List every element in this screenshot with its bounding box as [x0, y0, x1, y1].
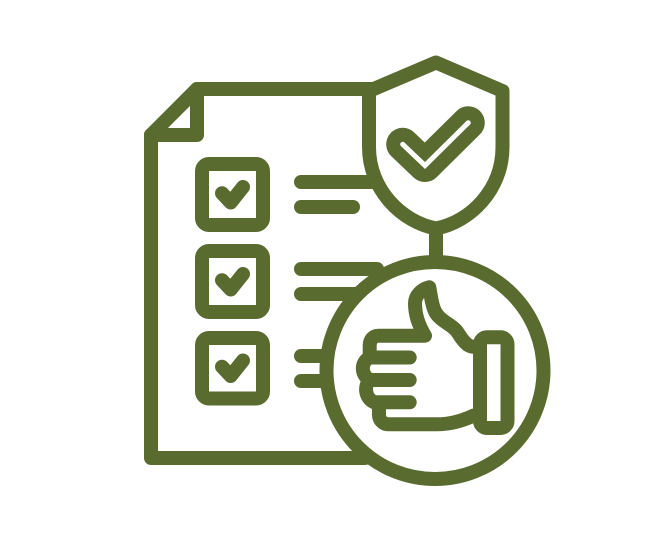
connector between shield and circle	[429, 228, 443, 262]
icon: cuff	[480, 337, 508, 428]
checkbox 1	[202, 164, 263, 225]
circle with thumbs up	[326, 262, 544, 479]
checkbox 2	[202, 251, 263, 312]
checkbox 3	[202, 338, 263, 398]
shield with check mark	[369, 62, 502, 228]
document with folded corner	[151, 89, 372, 458]
icon: thumbs up hand	[363, 287, 508, 428]
text lines	[301, 182, 385, 381]
